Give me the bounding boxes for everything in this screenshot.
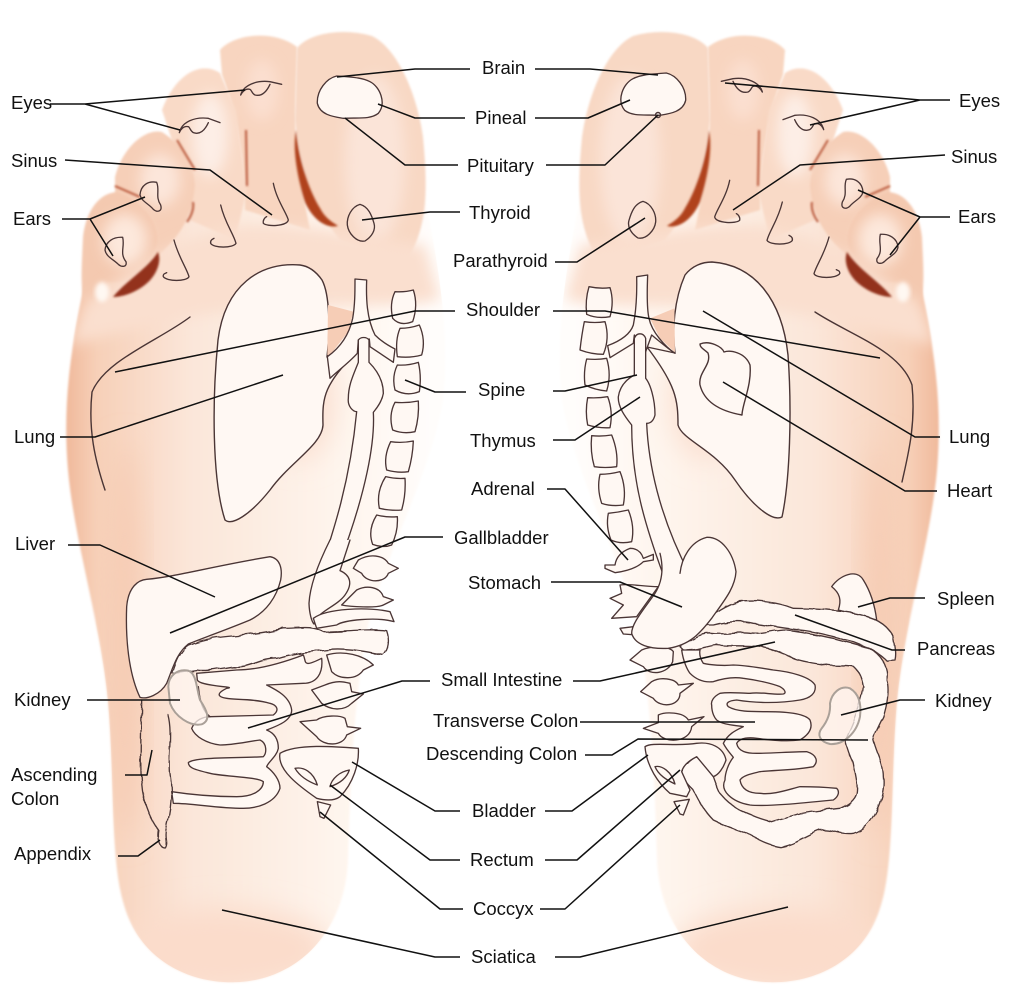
coccyx (317, 802, 331, 818)
label: Rectum (330, 770, 680, 870)
label: Eyes left: Eyes (11, 92, 52, 113)
colon (680, 630, 888, 847)
label: Gallbladder: Gallbladder (454, 527, 549, 548)
label: Lung right: Lung (949, 426, 990, 447)
label: Descending Colon (426, 739, 868, 764)
labels: left side (11, 90, 283, 864)
label: Adrenal: Adrenal (471, 478, 535, 499)
trachea (608, 275, 675, 358)
kidney (819, 688, 860, 744)
left foot organs (91, 76, 423, 847)
stomach (632, 537, 736, 648)
label: Pituitary (345, 115, 658, 176)
adrenal (605, 548, 653, 573)
label: Appendix (14, 840, 160, 864)
labels: center (115, 57, 880, 967)
label: Sinus right (733, 146, 997, 210)
label: Liver (15, 533, 215, 597)
ears (842, 179, 863, 208)
label: Sciatica (222, 907, 788, 967)
label: Sinus right: Sinus (951, 146, 997, 167)
pineal (317, 76, 382, 118)
label: Sinus left: Sinus (11, 150, 57, 171)
label: Eyes right (725, 83, 1000, 125)
pancreas (703, 601, 896, 661)
label: Lung right (703, 311, 990, 447)
label: Shoulder (115, 299, 880, 372)
label: Ascending Colon: Ascending (11, 764, 97, 785)
wedge shading (650, 308, 675, 352)
heart (700, 343, 750, 415)
label: Transverse Colon: Transverse Colon (433, 710, 578, 731)
label: Small Intestine (248, 642, 775, 728)
pituitary dot (656, 112, 660, 118)
label: Stomach: Stomach (468, 572, 541, 593)
label: Small Intestine: Small Intestine (441, 669, 562, 690)
label: Heart: Heart (947, 480, 992, 501)
label: Kidney left: Kidney (14, 689, 71, 710)
label: Thymus (470, 397, 640, 451)
label: Bladder: Bladder (472, 800, 536, 821)
label: Ears left: Ears (13, 208, 51, 229)
parathyroid (629, 201, 656, 238)
label: Parathyroid: Parathyroid (453, 250, 548, 271)
label: Ears left (13, 197, 145, 256)
label: Ascending Colon: Colon (11, 788, 59, 809)
label: Lung left (14, 375, 283, 447)
label: Lung left: Lung (14, 426, 55, 447)
label: Sciatica: Sciatica (471, 946, 536, 967)
ears (140, 182, 161, 211)
trachea, thymus and thoracic spine: left foot (320, 279, 423, 572)
label: Adrenal (471, 478, 628, 560)
spleen (832, 574, 877, 620)
thymus (320, 337, 383, 572)
small intestine (682, 650, 838, 805)
label: Ears right (858, 190, 996, 255)
label: Pancreas (795, 615, 995, 659)
label: Thyroid: Thyroid (469, 202, 531, 223)
right foot organs (580, 73, 913, 847)
noses (263, 183, 288, 226)
label: Spleen: Spleen (937, 588, 995, 609)
small intestine (172, 655, 322, 808)
label: Eyes left (11, 90, 245, 130)
label: Ascending Colon (11, 750, 152, 809)
label: Gallbladder (170, 527, 549, 633)
label: Thyroid (362, 202, 531, 223)
wedge shading (327, 305, 353, 355)
eyes (241, 81, 282, 95)
label: Descending Colon: Descending Colon (426, 743, 577, 764)
label: Pineal: Pineal (475, 107, 526, 128)
right foot (560, 32, 939, 992)
lower lumbar vertebrae (630, 647, 673, 673)
label: Sinus left (11, 150, 272, 215)
label: Coccyx (320, 805, 680, 919)
label: Brain (337, 57, 658, 78)
gallbladder (309, 540, 350, 624)
thyroid (347, 204, 374, 241)
label: Spleen (858, 588, 995, 609)
noses (715, 180, 740, 223)
trachea (327, 279, 395, 378)
trachea, thymus and thoracic spine: right foot (580, 275, 690, 575)
label: Kidney right (841, 690, 992, 715)
label: Thymus: Thymus (470, 430, 536, 451)
thymus (618, 334, 690, 575)
lung and shoulder: left foot (91, 265, 356, 522)
label: Parathyroid (453, 218, 645, 271)
labels: right side (703, 83, 1000, 715)
label: Kidney right: Kidney (935, 690, 992, 711)
label: Eyes right: Eyes (959, 90, 1000, 111)
lumbar vertebrae (353, 556, 398, 581)
eyes (721, 78, 762, 92)
ascending colon (141, 700, 171, 847)
label: Bladder (352, 755, 648, 821)
transverse colon (172, 627, 388, 673)
lung and shoulder: right foot (647, 262, 913, 518)
label: Spine (405, 375, 637, 400)
label: Liver: Liver (15, 533, 55, 554)
label: Heart (723, 382, 992, 501)
label: Shoulder: Shoulder (466, 299, 540, 320)
label: Brain: Brain (482, 57, 525, 78)
label: Ears right: Ears (958, 206, 996, 227)
label: Pineal (378, 100, 630, 128)
coccyx (674, 799, 689, 815)
label: Stomach (468, 572, 682, 607)
sense organs: right toes (621, 73, 898, 277)
sense organs: left toes (105, 76, 382, 280)
bladder (280, 746, 358, 800)
vertebrae (391, 290, 416, 324)
vertebrae (586, 287, 612, 317)
pineal (621, 73, 686, 115)
label: Pancreas: Pancreas (917, 638, 995, 659)
lower digestive and pelvis: left foot (126, 540, 398, 847)
left foot (66, 32, 445, 992)
upper lumbar vertebrae (610, 585, 658, 618)
label: Pituitary: Pituitary (467, 155, 535, 176)
label: Spine: Spine (478, 379, 525, 400)
label: Rectum: Rectum (470, 849, 534, 870)
liver (126, 557, 281, 698)
kidney (168, 670, 207, 725)
label: Appendix: Appendix (14, 843, 92, 864)
lower digestive and pelvis: right foot (610, 537, 896, 847)
label: Coccyx: Coccyx (473, 898, 534, 919)
bladder (645, 743, 726, 797)
